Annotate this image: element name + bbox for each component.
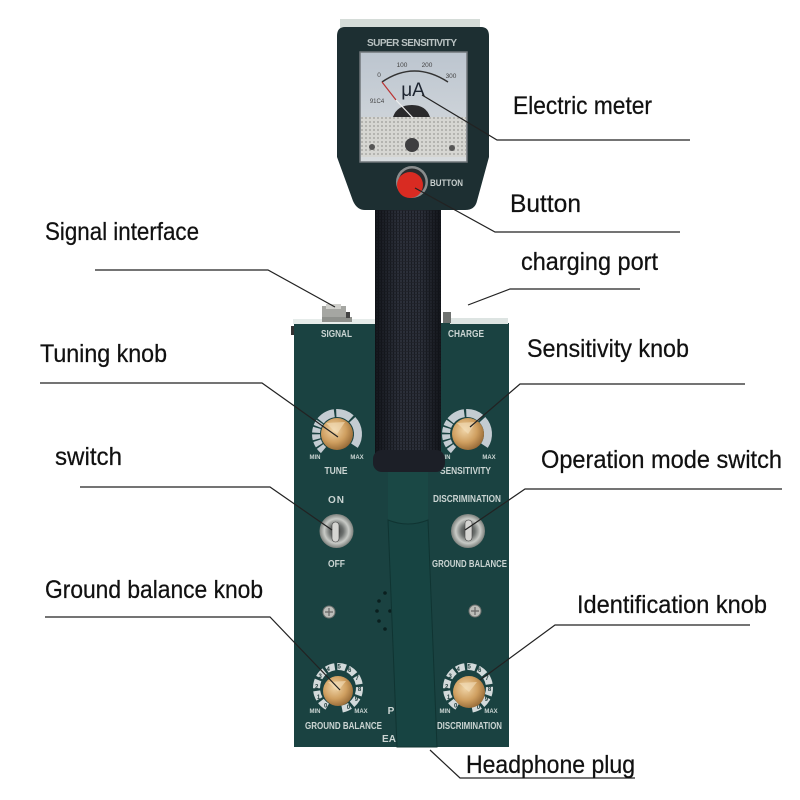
panel: center strap	[388, 470, 437, 747]
icon: speaker holes	[375, 591, 392, 631]
text: min max marks: MAX	[484, 709, 498, 715]
text: min max marks: MAX	[350, 455, 364, 461]
meter dial face: 300	[446, 73, 457, 80]
label: Operation mode switch: Operation mode switch	[541, 446, 782, 474]
text: panel labels: P	[388, 706, 395, 717]
label: switch: switch	[55, 443, 122, 471]
meter dial face: 0	[377, 72, 381, 79]
text: panel labels: DISCRIMINATION	[437, 721, 502, 732]
icon: identification knob	[439, 659, 497, 717]
text: panel labels: GROUND BALANCE	[305, 721, 382, 732]
panel: meter head	[337, 19, 489, 210]
icon: charging port	[443, 312, 451, 323]
icon: screws	[323, 605, 481, 618]
text: min max marks: MIN	[310, 709, 320, 715]
text: panel labels: EA	[382, 734, 396, 745]
text: button label: BUTTON	[430, 178, 463, 189]
icon: operation mode switch	[451, 514, 485, 548]
label: Sensitivity knob: Sensitivity knob	[527, 335, 689, 363]
leader lines	[40, 95, 782, 778]
label: charging port: charging port	[521, 248, 658, 276]
text: min max marks: MIN	[310, 455, 320, 461]
meter dial face: 200	[422, 62, 433, 69]
icon: sensitivity knob	[437, 404, 497, 464]
meter dial face: μA	[401, 80, 425, 101]
icon: red button	[396, 166, 428, 198]
label: Signal interface: Signal interface	[45, 218, 199, 246]
label: Headphone plug: Headphone plug	[466, 751, 635, 779]
text: min max marks	[310, 455, 498, 715]
text: panel labels: CHARGE	[448, 329, 484, 340]
text: min max marks: MIN	[440, 709, 450, 715]
text: panel labels: SIGNAL	[321, 329, 352, 340]
panel: detector control box	[291, 304, 509, 747]
icon: on off switch	[320, 514, 354, 548]
text: panel labels	[305, 329, 507, 745]
text: panel labels: SENSITIVITY	[440, 466, 491, 477]
text: panel labels: OFF	[328, 559, 345, 570]
text: panel labels: DISCRIMINATION	[433, 494, 501, 505]
label: Button: Button	[510, 190, 581, 218]
meter dial face: 91C4	[370, 99, 385, 105]
icon: rubber handle	[373, 205, 445, 472]
text: panel labels: O N	[328, 495, 344, 506]
text: panel labels: TUNE	[324, 466, 348, 477]
text: min max marks: MIN	[440, 455, 450, 461]
text: min max marks: MAX	[354, 709, 368, 715]
icon: signal connector	[322, 304, 352, 322]
text: min max marks: MAX	[482, 455, 496, 461]
meter dial face: 100	[397, 62, 408, 69]
text: super sensitivity: SUPER SENSITIVITY	[367, 38, 457, 49]
icon: ground balance knob	[309, 659, 367, 717]
label: Ground balance knob: Ground balance knob	[45, 576, 263, 604]
icon: tuning knob	[307, 404, 367, 464]
text: panel labels: GROUND BALANCE	[432, 559, 507, 570]
meter dial face	[360, 52, 467, 162]
label: Tuning knob: Tuning knob	[40, 340, 167, 368]
label: Electric meter: Electric meter	[513, 92, 652, 120]
label: Identification knob: Identification knob	[577, 591, 767, 619]
